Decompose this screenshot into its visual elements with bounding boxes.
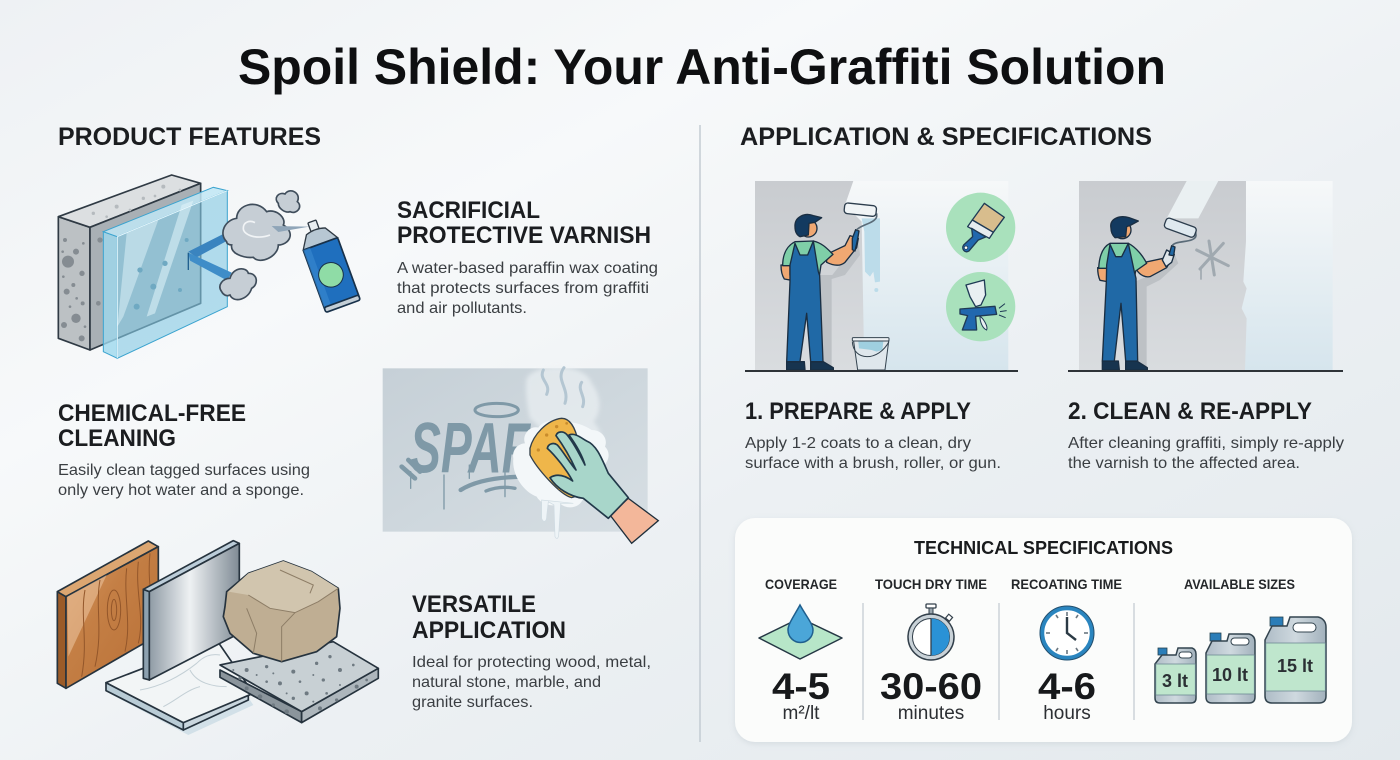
panel: application and specifications (735, 123, 1352, 744)
feature text: versatile application: VERSATILE (412, 591, 536, 618)
spec: coverage (759, 576, 842, 724)
spec: recoating time: RECOATING TIME (1011, 576, 1122, 592)
panel: technical specifications (735, 518, 1352, 744)
icon: spray gun (946, 272, 1015, 341)
illustration: step 1 worker painting wall (755, 181, 1015, 370)
jug: 3 lt: 3 lt (1162, 671, 1188, 691)
spec: coverage: 4-5 (772, 666, 830, 707)
panel: product features (57, 123, 658, 735)
jug: 3 lt (1155, 648, 1196, 703)
feature text: chemical-free cleaning: CHEMICAL-FREE (58, 400, 246, 427)
text: step 2 clean and re-apply: 2. CLEAN & RE-APPLY (1068, 398, 1312, 425)
spec: coverage: COVERAGE (765, 576, 837, 592)
illustration: cleaning graffiti with sponge and hot water: SPAF (410, 408, 531, 488)
text: step 2 clean and re-apply (1068, 398, 1344, 472)
icon: wood, metal, stone, marble and granite materials (57, 541, 378, 735)
spec: recoating time (1011, 576, 1122, 724)
heading: application and specifications: APPLICATION & SPECIFICATIONS (740, 123, 1152, 151)
feature text: sacrificial protective varnish: SACRIFICIAL (397, 197, 540, 224)
spec: touch dry time (875, 576, 987, 724)
feature text: versatile application (412, 591, 651, 711)
text: step 1 prepare and apply (745, 398, 1001, 472)
text: step 1 prepare and apply: 1. PREPARE & APPLY (745, 398, 971, 425)
jug: 15 lt: 15 lt (1277, 656, 1313, 676)
feature text: versatile application: APPLICATION (412, 617, 566, 644)
feature text: sacrificial protective varnish: and air pollutants. (397, 300, 527, 317)
feature text: sacrificial protective varnish (397, 197, 658, 317)
heading: product features: PRODUCT FEATURES (58, 123, 321, 151)
feature text: versatile application: Ideal for protecting wood, metal, (412, 654, 651, 671)
feature text: sacrificial protective varnish: PROTECTIVE VARNISH (397, 222, 651, 249)
illustration: step 2 worker re-applying over graffiti (1079, 181, 1333, 370)
feature text: sacrificial protective varnish: A water-based paraffin wax coating (397, 260, 658, 277)
spec: available sizes (1155, 576, 1326, 703)
jug: 10 lt: 10 lt (1212, 665, 1248, 685)
spec: recoating time: hours (1043, 703, 1091, 724)
text: step 2 clean and re-apply: the varnish to the affected area. (1068, 455, 1300, 472)
illustration: cleaning graffiti with sponge and hot water (383, 367, 658, 543)
spec: touch dry time: TOUCH DRY TIME (875, 576, 987, 592)
feature text: chemical-free cleaning (58, 400, 310, 499)
feature text: versatile application: granite surfaces. (412, 694, 533, 711)
feature text: chemical-free cleaning: CLEANING (58, 425, 176, 452)
worker (1098, 217, 1175, 370)
heading: technical specifications: TECHNICAL SPECIFICATIONS (914, 538, 1173, 558)
graffiti mark (1197, 241, 1228, 279)
icon: protective varnish block with spray can (58, 175, 360, 358)
title: Spoil Shield: Your Anti-Graffiti Solution (238, 39, 1166, 95)
spec: coverage: m²/lt (783, 703, 820, 724)
feature text: versatile application: natural stone, marble, and (412, 674, 601, 691)
jug: 10 lt (1206, 633, 1255, 703)
spec: touch dry time: 30-60 (880, 666, 982, 707)
feature text: chemical-free cleaning: only very hot water and a sponge. (58, 482, 304, 499)
spec: recoating time: 4-6 (1038, 666, 1096, 707)
worker (781, 215, 859, 370)
spec: available sizes: AVAILABLE SIZES (1184, 576, 1295, 592)
icon: bucket (852, 338, 889, 370)
text: step 1 prepare and apply: surface with a brush, roller, or gun. (745, 455, 1001, 472)
spec: touch dry time: minutes (898, 703, 964, 724)
feature text: sacrificial protective varnish: that protects surfaces from graffiti (397, 280, 649, 297)
jug: 15 lt (1265, 617, 1326, 703)
feature text: chemical-free cleaning: Easily clean tagged surfaces using (58, 462, 310, 479)
text: step 2 clean and re-apply: After cleaning graffiti, simply re-apply (1068, 435, 1344, 452)
text: step 1 prepare and apply: Apply 1-2 coats to a clean, dry (745, 435, 971, 452)
icon: brush (946, 193, 1015, 262)
